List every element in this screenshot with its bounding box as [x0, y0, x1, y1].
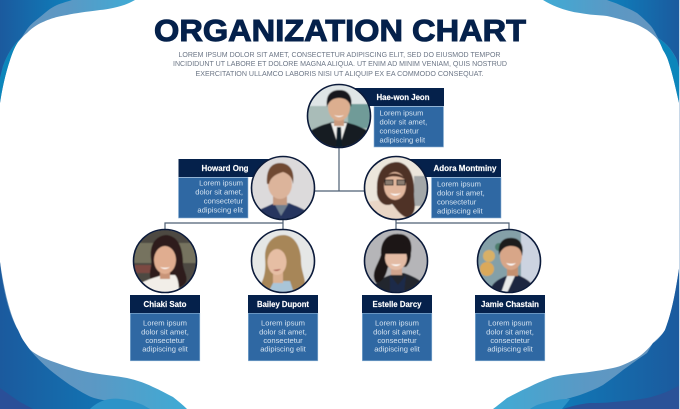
- description: [432, 178, 501, 218]
- name header: Estelle Darcy: [372, 300, 422, 309]
- description: dolor sit amet,: [380, 118, 427, 126]
- description: Lorem ipsum: [380, 108, 423, 118]
- card: Jamie Chastain: [475, 229, 545, 361]
- name header: Bailey Dupont: [257, 300, 309, 309]
- description: consectetur: [380, 126, 419, 136]
- card: Bailey Dupont: [248, 229, 318, 361]
- name header: Chiaki Sato: [144, 300, 186, 309]
- description: Lorem ipsum: [488, 318, 532, 328]
- description: adipiscing elit: [260, 344, 307, 354]
- card: Howard Ong: [178, 156, 315, 220]
- background wave: top right: [543, 0, 680, 409]
- description: [475, 313, 545, 361]
- description: dolor sit amet,: [373, 328, 421, 336]
- subtitle text block: [173, 50, 507, 78]
- portrait: [364, 229, 428, 293]
- card: Adora Montminy: [364, 156, 501, 220]
- name header: Jamie Chastain: [481, 300, 539, 309]
- description: dolor sit amet,: [486, 328, 534, 336]
- description: consectetur: [263, 336, 303, 345]
- background wave: top left: [0, 0, 135, 103]
- description: [178, 178, 248, 218]
- description: consectetur: [490, 336, 530, 345]
- background wave: bottom left: [0, 262, 187, 409]
- description: consectetur: [377, 336, 417, 345]
- description: dolor sit amet,: [141, 328, 189, 336]
- description: Lorem ipsum: [261, 318, 305, 328]
- description: [248, 313, 318, 361]
- name header: Adora Montminy: [434, 164, 497, 173]
- connector lines: [165, 146, 509, 230]
- description: consectetur: [437, 198, 477, 206]
- description: adipiscing elit: [487, 344, 534, 354]
- description: [374, 106, 444, 147]
- name header: Howard Ong: [202, 164, 248, 173]
- description: adipiscing elit: [437, 206, 483, 216]
- description: adipiscing elit: [142, 344, 189, 354]
- description: Lorem ipsum: [143, 318, 187, 328]
- description: consectetur: [145, 336, 185, 345]
- subtitle text block: INCIDIDUNT UT LABORE ET DOLORE MAGNA ALIQUA. UT ENIM AD MINIM VENIAM, QUIS NOSTRUD: [173, 59, 507, 68]
- portrait: [364, 156, 428, 220]
- portrait: [251, 229, 315, 293]
- card: Chiaki Sato: [130, 229, 200, 361]
- description: Lorem ipsum: [199, 178, 243, 188]
- title: ORGANIZATION CHART: [154, 13, 526, 48]
- subtitle text block: LOREM IPSUM DOLOR SIT AMET, CONSECTETUR ADIPISCING ELIT, SED DO EIUSMOD TEMPOR: [178, 50, 500, 59]
- description: adipiscing elit: [380, 136, 426, 144]
- description: dolor sit amet,: [195, 188, 243, 196]
- description: [130, 313, 200, 361]
- card: Estelle Darcy: [362, 229, 432, 361]
- description: [362, 313, 432, 361]
- description: dolor sit amet,: [437, 188, 485, 198]
- description: Lorem ipsum: [437, 180, 481, 188]
- description: Lorem ipsum: [375, 318, 419, 328]
- portrait: [307, 84, 372, 148]
- description: adipiscing elit: [374, 344, 421, 354]
- description: consectetur: [204, 196, 243, 206]
- portrait: [251, 156, 315, 220]
- card: Hae-won Jeon: [307, 84, 444, 148]
- portrait: [477, 229, 541, 293]
- background wave: bottom right: [493, 0, 680, 409]
- portrait: [133, 229, 197, 293]
- subtitle text block: EXERCITATION ULLAMCO LABORIS NISI UT ALIQUIP EX EA COMMODO CONSEQUAT.: [196, 69, 484, 78]
- name header: Hae-won Jeon: [376, 93, 430, 102]
- description: adipiscing elit: [197, 206, 244, 214]
- description: dolor sit amet,: [259, 328, 307, 336]
